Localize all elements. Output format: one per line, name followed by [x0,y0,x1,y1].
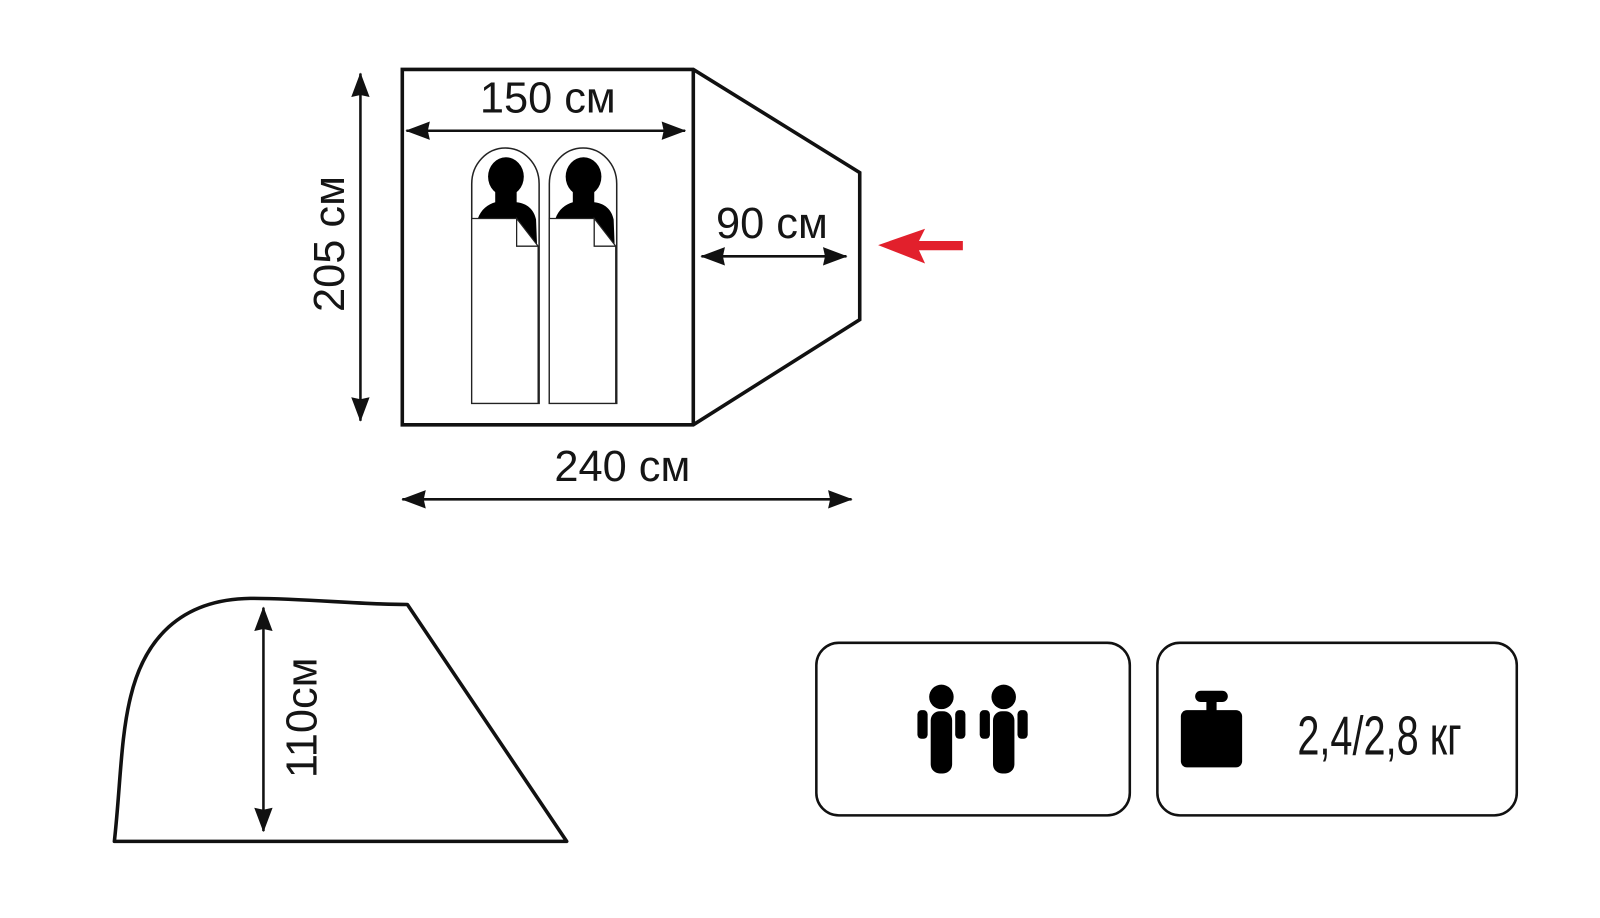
dimension: 240 cm length: 240 см [554,443,690,491]
dimension: 90 cm vestibule: 90 см [716,200,828,248]
tent floor plan outline [402,69,860,425]
weight panel [1157,643,1517,815]
capacity panel [816,643,1130,815]
icon: weight [1181,691,1242,767]
sleeping bag right [549,148,617,403]
dimension: 110 cm height: 110см [279,658,327,778]
weight value: 2,4/2,8 кг [1297,706,1462,767]
icon: person right [980,685,1028,773]
red entrance arrow [878,229,963,263]
dimension: 150 cm width: 150 см [480,74,616,122]
icon: person left [917,685,965,773]
dimension: 205 cm depth: 205 см [306,176,354,312]
tent side profile [114,598,567,841]
sleeping bag left [472,148,539,403]
